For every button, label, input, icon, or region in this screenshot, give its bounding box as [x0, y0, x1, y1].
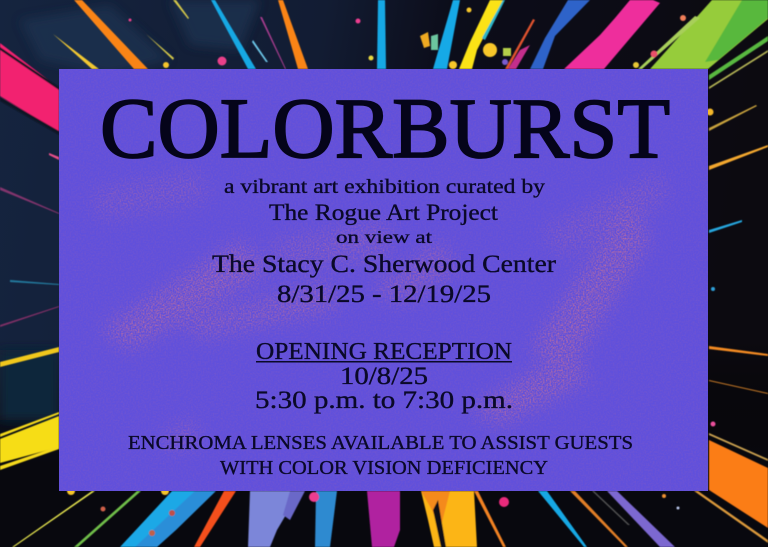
text: reception time: 5:30 p.m. to 7:30 p.m.	[255, 387, 513, 414]
rays: top right	[420, 0, 768, 170]
rays: top left	[0, 0, 386, 135]
text: curated by: a vibrant art exhibition curated by	[224, 176, 545, 198]
text: The Rogue Art Project: The Rogue Art Project	[269, 200, 499, 225]
text: on view at: on view at	[336, 227, 432, 247]
panel: purple exhibition card	[59, 69, 708, 491]
heading: opening reception: OPENING RECEPTION	[256, 339, 512, 365]
rays: right side	[694, 220, 768, 543]
text: accessibility line 1: ENCHROMA LENSES AVAILABLE TO ASSIST GUESTS	[128, 433, 633, 454]
text: venue: The Stacy C. Sherwood Center	[212, 251, 557, 278]
text: reception date: 10/8/25	[340, 363, 428, 390]
rays: left side	[0, 153, 59, 470]
text: accessibility line 2: WITH COLOR VISION DEFICIENCY	[220, 458, 548, 479]
text: dates: 8/31/25 - 12/19/25	[277, 281, 491, 308]
rays: bottom	[12, 487, 680, 547]
title: COLORBURST	[100, 80, 670, 176]
